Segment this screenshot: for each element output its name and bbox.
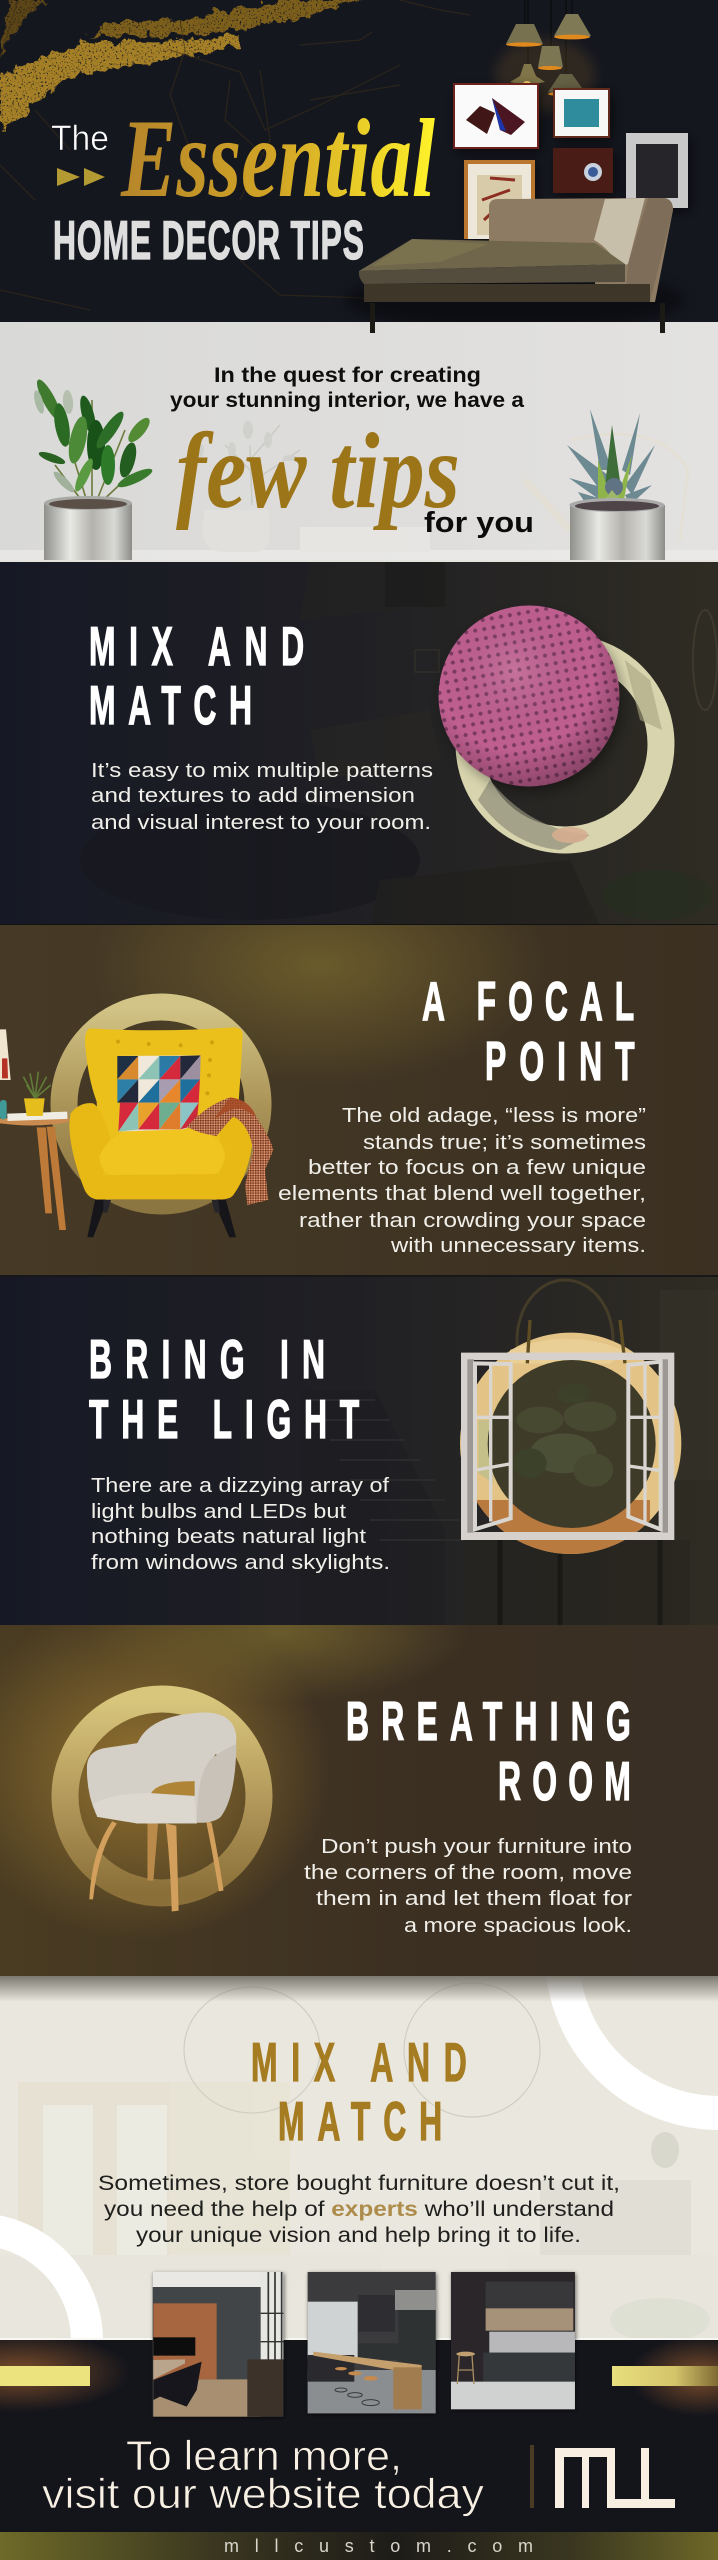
heading: POINT	[485, 1030, 635, 1092]
heading	[251, 2031, 467, 2152]
body text: There are a dizzying array of	[91, 1475, 390, 1497]
intro text: In the quest for creating	[214, 364, 481, 387]
body text	[91, 760, 433, 834]
heading: MATCH	[278, 2090, 442, 2152]
panel: a focal point	[0, 925, 718, 1275]
icon: right aloe plant	[567, 409, 665, 560]
body text	[91, 1475, 390, 1574]
body text: your unique vision and help bring it to life.	[136, 2224, 581, 2247]
sofa legs overlap	[370, 303, 665, 333]
heading: MATCH	[89, 674, 252, 736]
call to action text: To learn more,	[126, 2432, 402, 2479]
lamps	[495, 0, 595, 111]
ring	[64, 1007, 258, 1201]
heading: A FOCAL	[422, 970, 634, 1032]
heading: The Essential Home Decor Tips: HOME DECOR TIPS	[53, 209, 364, 271]
legs	[87, 1200, 236, 1237]
body text: It’s easy to mix multiple patterns	[91, 760, 433, 782]
table and plant	[0, 1029, 69, 1230]
heading	[89, 1328, 359, 1450]
call to action text	[42, 2432, 484, 2517]
heading: THE LIGHT	[89, 1388, 359, 1450]
body text	[304, 1836, 632, 1937]
faint room background	[80, 562, 717, 925]
call to action text: visit our website today	[42, 2470, 484, 2517]
logo	[555, 2448, 675, 2508]
panel: closing call to action	[0, 1976, 718, 2560]
body text: elements that blend well together,	[278, 1183, 646, 1205]
body text: nothing beats natural light	[91, 1526, 367, 1548]
icon: double arrow	[57, 168, 105, 186]
heading: The Essential Home Decor Tips: The	[51, 119, 109, 158]
intro text: for you	[424, 507, 534, 539]
panel: bring in the light	[88, 1277, 718, 1625]
ring	[65, 1699, 259, 1893]
icon: knit ball	[438, 606, 623, 792]
body text: rather than crowding your space	[299, 1210, 646, 1232]
ring with room image	[469, 648, 662, 850]
intro text: few tips	[176, 412, 460, 531]
heading: ROOM	[498, 1750, 631, 1812]
body text: and textures to add dimension	[91, 785, 415, 807]
panel: header	[0, 0, 718, 330]
body text	[278, 1105, 646, 1257]
heading: MIX AND	[89, 615, 304, 677]
body text: you need the help of experts who’ll understand	[104, 2198, 614, 2221]
icon: grey armchair	[87, 1713, 236, 1911]
dark footer band	[0, 2338, 718, 2412]
body text: a more spacious look.	[404, 1915, 632, 1937]
body text: Don’t push your furniture into	[321, 1836, 632, 1858]
heading: BRING IN	[89, 1328, 325, 1390]
icon: left potted plant	[32, 377, 154, 560]
heading: MIX AND	[251, 2031, 467, 2093]
pillow	[117, 1055, 201, 1132]
heading: The Essential Home Decor Tips	[51, 97, 435, 271]
body text: them in and let them float for	[316, 1888, 632, 1910]
intro text: your stunning interior, we have a	[170, 389, 524, 412]
body text: stands true; it’s sometimes	[363, 1132, 646, 1154]
heading: BREATHING	[346, 1690, 631, 1752]
kitchen photo 1	[153, 2272, 283, 2417]
framed art	[453, 83, 688, 239]
body text: and visual interest to your room.	[91, 812, 431, 834]
body text: The old adage, “less is more”	[342, 1105, 646, 1127]
marble gold veins	[0, 0, 470, 310]
intro text	[170, 364, 534, 539]
sofa	[345, 198, 685, 330]
faint background still life	[0, 421, 718, 560]
body text: with unnecessary items.	[390, 1235, 646, 1257]
body text: from windows and skylights.	[91, 1552, 390, 1574]
faint background shapes	[0, 1982, 718, 2338]
body text: Sometimes, store bought furniture doesn’t cut it,	[98, 2172, 620, 2195]
heading	[89, 615, 304, 736]
throw	[187, 1097, 273, 1205]
website bar: mllcustom.com	[224, 2536, 533, 2556]
heading	[346, 1690, 631, 1812]
body text: better to focus on a few unique	[308, 1157, 646, 1179]
website bar	[0, 2532, 718, 2560]
heading	[422, 970, 635, 1092]
panel: mix and match	[0, 560, 718, 925]
kitchen photo 2	[308, 2272, 436, 2413]
body	[85, 1027, 243, 1177]
panel: intro	[0, 303, 718, 560]
heading: The Essential Home Decor Tips: Essential	[120, 97, 435, 221]
kitchen photo 3	[451, 2272, 575, 2409]
body text: light bulbs and LEDs but	[91, 1501, 347, 1523]
body text: the corners of the room, move	[304, 1862, 632, 1884]
faint staircase background	[300, 1280, 718, 1625]
divider	[530, 2445, 534, 2508]
body text	[98, 2172, 620, 2247]
yellow armchair scene	[0, 1027, 273, 1237]
icon: open window with ring	[460, 1320, 681, 1557]
panel: breathing room	[0, 1625, 718, 1976]
